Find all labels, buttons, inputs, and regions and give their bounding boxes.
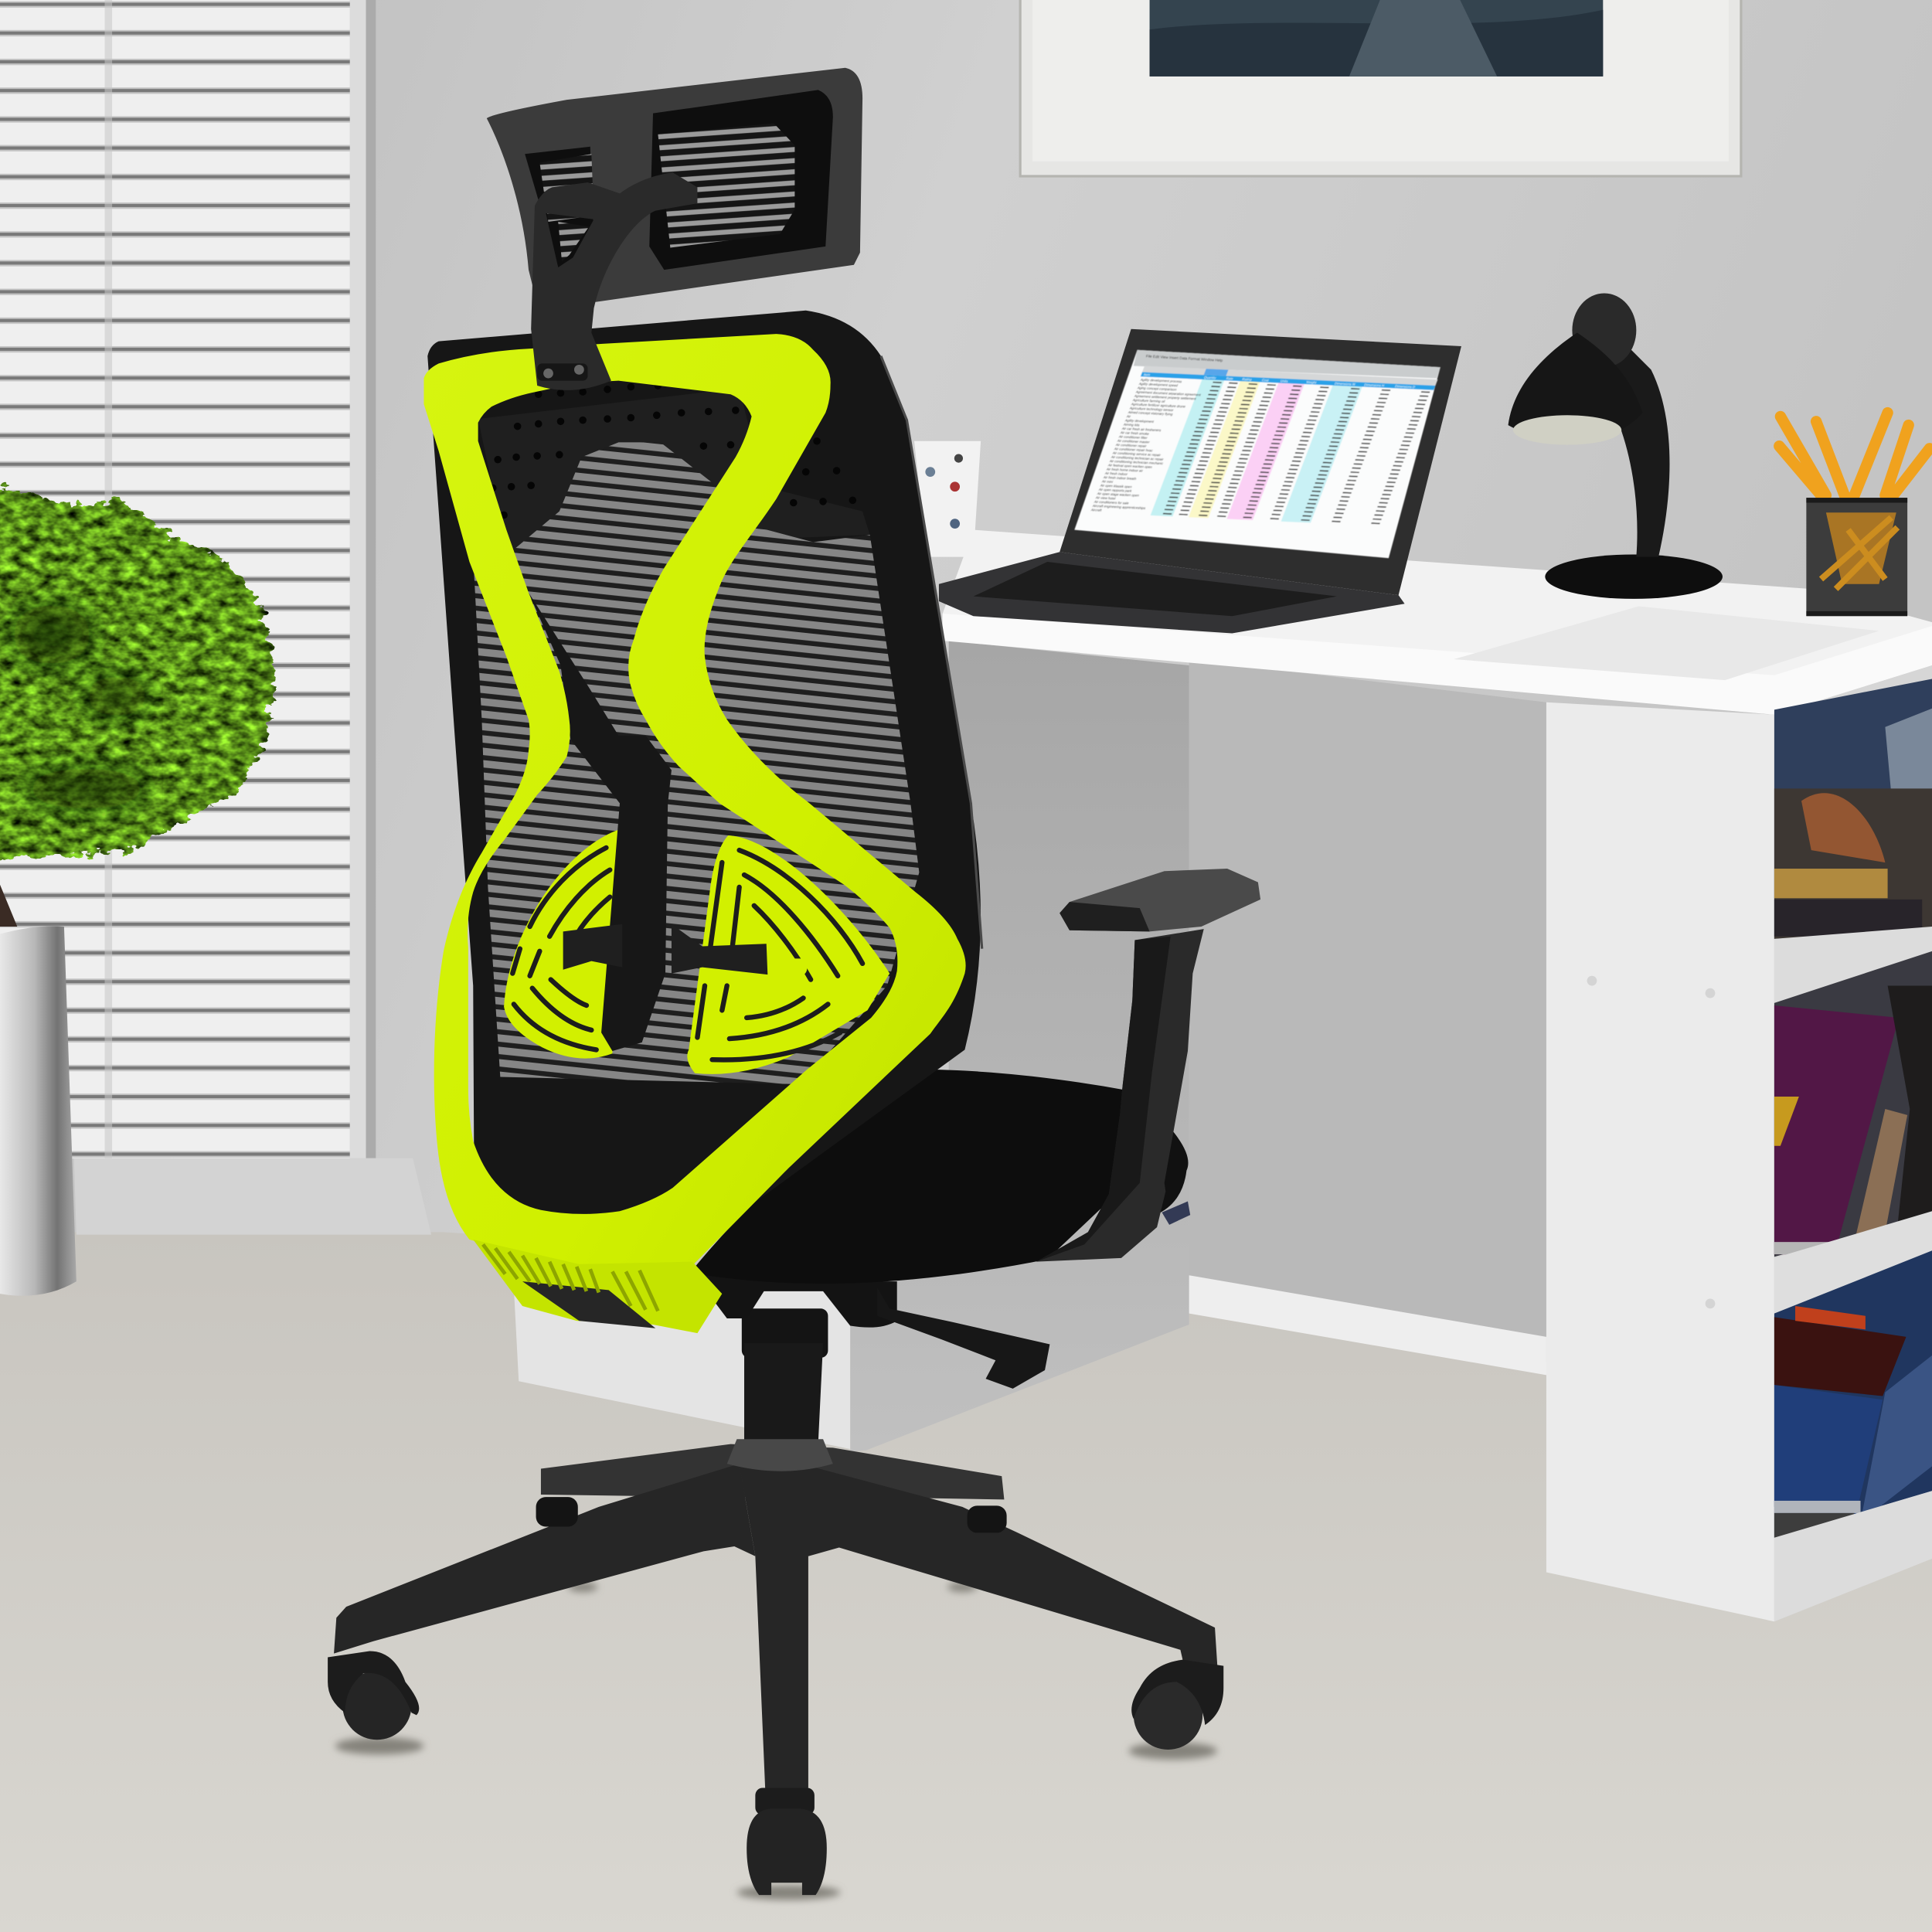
window blinds [0, 0, 376, 1158]
lower shelf books [1774, 1250, 1932, 1538]
laptop lid [1060, 329, 1461, 595]
base hub [727, 1439, 833, 1471]
spreadsheet table: Air open rapports park [1098, 488, 1133, 493]
plant stem [0, 885, 17, 927]
spreadsheet table: Weight [1306, 380, 1318, 384]
lower shelf board [1774, 1211, 1932, 1314]
mesh panel [473, 442, 919, 1084]
plant foliage [0, 487, 276, 856]
spreadsheet table: Agreement settlement property settlement [1134, 394, 1197, 400]
spreadsheet table: Agreement document separation agreement [1135, 390, 1202, 396]
spreadsheet toolbar [1134, 350, 1440, 378]
headrest left mesh [539, 154, 594, 222]
spreadsheet table: Aimed concept visionary flying [1128, 410, 1174, 416]
wall background [0, 0, 1932, 1355]
top shelf book: bird cover [1774, 679, 1932, 939]
spreadsheet table: Air view hotel [1095, 495, 1116, 500]
middle shelf board [1774, 927, 1932, 1003]
spreadsheet table: Agility development [1124, 418, 1155, 423]
top dotted plate [478, 388, 870, 549]
gas lift [742, 1308, 828, 1444]
skirting board [1189, 1275, 1546, 1375]
pencil holder [1779, 413, 1930, 616]
spreadsheet table: Air mini [1101, 479, 1114, 484]
lime green frame [423, 334, 966, 1284]
framed picture [1020, 0, 1741, 176]
seat mechanism [690, 1269, 897, 1328]
spreadsheet table: Agriculture technology sensor [1129, 406, 1175, 412]
window sill [74, 1158, 431, 1235]
headrest [487, 68, 862, 304]
lumbar bracket [563, 924, 807, 976]
spreadsheet table: Aging concept comparison [1137, 386, 1178, 392]
desk right leg [1546, 702, 1774, 1621]
headrest bracket arm [531, 172, 697, 390]
left lumbar pad [504, 829, 620, 1059]
spreadsheet table: Agility development process [1140, 378, 1183, 383]
mesh back frame [427, 311, 981, 1232]
laptop [939, 329, 1461, 634]
headrest shell [487, 68, 862, 304]
spreadsheet table: Air car fresh smoke [1120, 430, 1150, 436]
spreadsheet table: Rating [1242, 377, 1253, 382]
five-star base [334, 1444, 1217, 1787]
spreadsheet table: Agriculture fertilizer agriculture drone [1131, 402, 1186, 409]
desk top [943, 530, 1932, 715]
central Y spine [529, 593, 672, 1051]
seat rear bulge [1109, 1115, 1189, 1213]
chair [328, 68, 1260, 1900]
seat cushion [690, 1070, 1128, 1284]
spreadsheet table: Air conditioning technician ac repair [1111, 455, 1165, 461]
back shell edge highlight [881, 356, 982, 949]
spreadsheet table: Air open klassik open [1100, 484, 1133, 488]
dark foliage hollows [12, 605, 149, 808]
armrest [1036, 869, 1260, 1262]
plate perforations [489, 382, 856, 519]
keyboard [974, 562, 1337, 616]
spreadsheet toolbar: File Edit View Insert Data Format Window Help [1146, 354, 1223, 363]
chair shadows [335, 1582, 1217, 1900]
tilt lever [877, 1287, 1049, 1389]
headrest recess [649, 90, 833, 270]
floor [0, 1232, 1932, 1932]
spreadsheet table: Air conditioner filter [1118, 435, 1148, 440]
headrest right mesh [658, 123, 794, 247]
spreadsheet table: Air fresh indoor [1104, 471, 1128, 476]
spreadsheet table: Air [1126, 414, 1132, 418]
spreadsheet table: Air car fresh air fresheners [1121, 427, 1162, 432]
desk left pedestal [514, 641, 1189, 1451]
spreadsheet table: Air conditioner repair [1115, 443, 1148, 448]
spreadsheet table: Air conditioner repair hvac [1114, 447, 1154, 452]
spreadsheet table: Dimensions H [1364, 383, 1385, 387]
spreadsheet table: Air open stage wacken open [1097, 492, 1140, 498]
spreadsheet table: Units [1280, 379, 1288, 383]
bottom shelf board [1774, 1491, 1932, 1621]
spreadsheet table: Aiming kits [1123, 423, 1141, 427]
spreadsheet table: Aircraft [1090, 508, 1103, 512]
spreadsheet table: Rate [1226, 376, 1234, 380]
spreadsheet table: Air conditioners for sale [1094, 500, 1130, 505]
spreadsheet table: Cost [1261, 378, 1270, 383]
vase [0, 926, 77, 1296]
spreadsheet table: Air conditioning technician mechanic [1109, 459, 1165, 465]
spreadsheet table [1089, 366, 1437, 526]
laptop screen [1074, 350, 1440, 558]
spreadsheet table: Air festival open wacken open [1107, 463, 1153, 469]
cup [914, 441, 981, 557]
desk lamp [1509, 293, 1723, 599]
spreadsheet table: Agriculture farming oil [1132, 398, 1165, 403]
spreadsheet table: Aircraft engineering apprenticeships [1092, 504, 1147, 510]
spreadsheet table: Quantity [1203, 376, 1217, 379]
spreadsheet table: Dimensions D [1394, 384, 1416, 389]
arm post [1036, 929, 1204, 1262]
bookshelf [1774, 665, 1932, 1621]
laptop keyboard base [939, 552, 1405, 634]
desk rear panel [1189, 659, 1546, 1343]
spreadsheet table: Agility development speed [1138, 382, 1179, 387]
spreadsheet table: Air fresh home indoor air [1106, 468, 1144, 473]
spreadsheet table: Item [1143, 372, 1151, 376]
right lumbar pad [687, 835, 889, 1074]
middle shelf books [1774, 951, 1932, 1257]
arm pad [1060, 869, 1260, 931]
seat tag [1162, 1202, 1190, 1225]
spreadsheet table: Dimensions W [1334, 382, 1357, 386]
spreadsheet table: Air fresh indoor breath [1103, 475, 1138, 481]
spreadsheet table: Air conditioner master [1117, 439, 1151, 444]
spreadsheet table: Air conditioning service ac repair [1112, 451, 1162, 457]
casters [328, 1497, 1223, 1895]
green lower vents [473, 1240, 722, 1333]
